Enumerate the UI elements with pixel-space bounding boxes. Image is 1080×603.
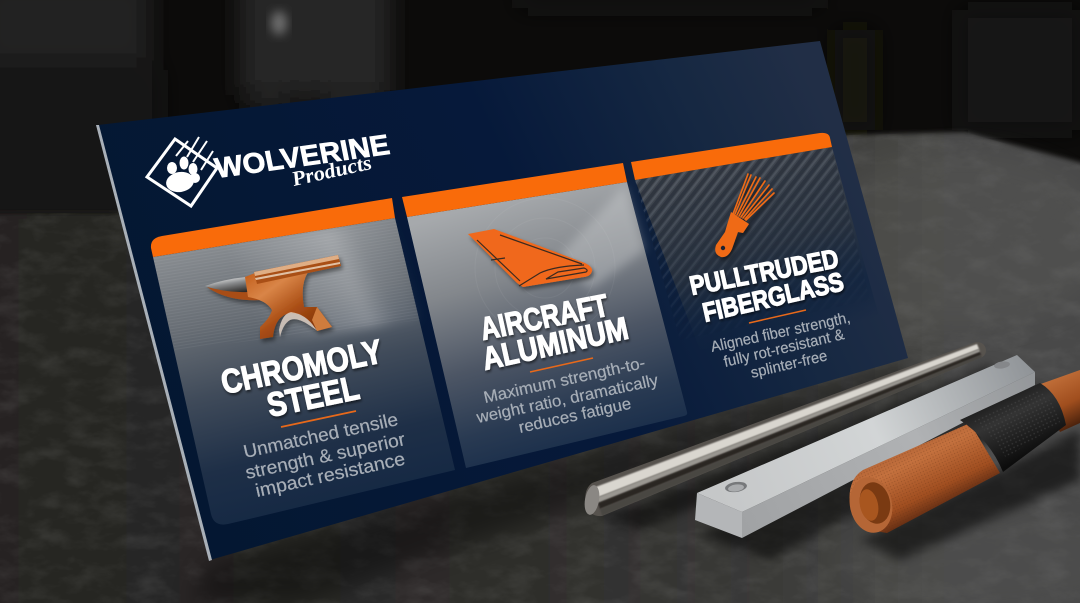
icon: fiberglass brush (715, 174, 774, 257)
divider (749, 310, 806, 323)
wordmark: WOLVERINE (212, 129, 392, 185)
photo: aluminum bar (695, 355, 1060, 560)
description: impact resistance (253, 448, 407, 501)
table texture (0, 130, 1080, 603)
title: CHROMOLY (218, 333, 386, 402)
panel: aircraft aluminum (402, 163, 687, 468)
title: ALUMINUM (479, 310, 632, 377)
title: STEEL (264, 369, 363, 425)
panel background (153, 218, 455, 525)
title: PULLTRUDED (687, 243, 841, 301)
title: FIBERGLASS (700, 266, 846, 328)
title (218, 333, 386, 425)
panel background (635, 147, 880, 350)
description: weight ratio, dramatically (474, 371, 661, 427)
orange header bar (402, 163, 627, 217)
panel: pulltruded fiberglass (631, 133, 880, 382)
description: strength & superior (243, 428, 407, 483)
logo: Wolverine Products (147, 129, 392, 206)
description: fully rot-resistant & (722, 326, 847, 371)
divider (281, 411, 356, 427)
wordmark script: Products (288, 152, 374, 191)
title: AIRCRAFT (477, 287, 612, 347)
panel background (407, 182, 687, 468)
description (709, 309, 852, 382)
description (474, 354, 661, 437)
description (241, 408, 407, 501)
description: Maximum strength-to- (482, 354, 647, 407)
description: splinter-free (749, 347, 829, 382)
description: reduces fatigue (517, 395, 633, 437)
photo: steel rod (580, 330, 1000, 530)
icon: aircraft tail wing (468, 229, 592, 287)
panel: chromoly steel (151, 198, 455, 525)
description: Aligned fiber strength, (709, 309, 852, 356)
sign board (96, 41, 908, 561)
table surface (0, 132, 1080, 603)
orange header bar (151, 198, 395, 257)
icon: paw in diamond (147, 137, 217, 206)
divider (530, 358, 593, 372)
icon: anvil (205, 255, 341, 339)
photo: fiberglass handle (845, 370, 1080, 560)
orange header bar (631, 133, 832, 180)
description: Unmatched tensile (241, 408, 400, 462)
title (687, 243, 846, 328)
